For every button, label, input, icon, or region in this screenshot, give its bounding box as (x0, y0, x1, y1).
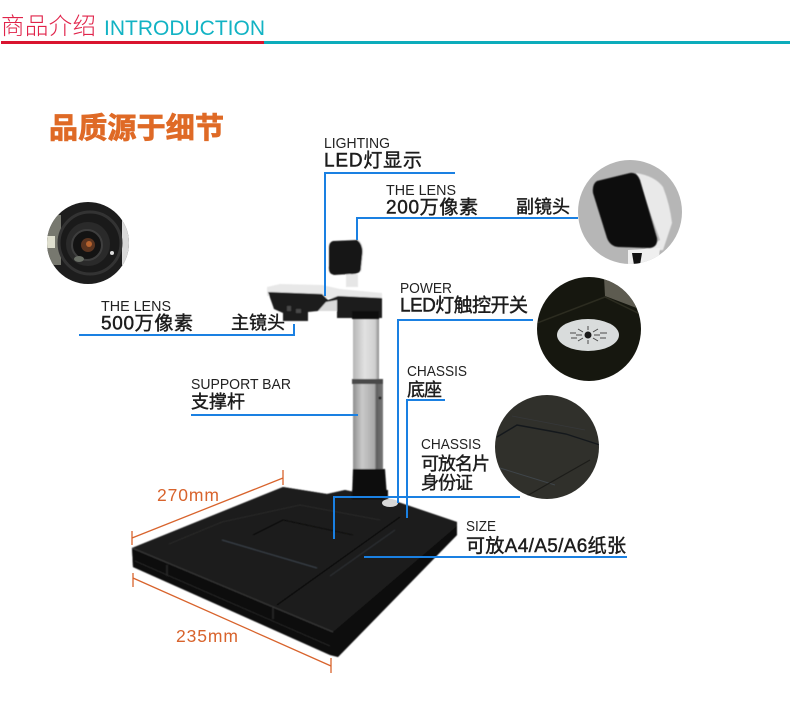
callout: chassis card slot: 可放名片 (421, 454, 490, 474)
callout: power: LED灯触控开关 (400, 294, 528, 316)
callout: secondary lens: 200万像素 (386, 196, 478, 218)
callout: paper size (364, 519, 627, 557)
header title: product introduction: INTRODUCTION (104, 17, 265, 40)
dimension: 235mm: 235mm (176, 626, 238, 646)
touch switch on base (382, 499, 398, 507)
callout: lighting (324, 136, 455, 296)
callout: power: POWER (400, 281, 452, 297)
callout: secondary lens (357, 183, 578, 240)
dimension: 270mm (132, 470, 283, 545)
callout: chassis base (407, 364, 467, 518)
callout: lighting: LIGHTING (324, 136, 390, 152)
callout: chassis base: CHASSIS (407, 364, 467, 380)
camera head arm (267, 284, 382, 321)
dimension: 270mm: 270mm (157, 485, 219, 505)
circle detail: power switch (537, 277, 642, 382)
callout: main lens (79, 299, 294, 335)
callout: power (398, 281, 533, 503)
header title: product introduction (1, 13, 265, 40)
callout: secondary lens: THE LENS (386, 183, 456, 199)
callout: main lens: 500万像素 (101, 312, 193, 334)
circle detail: chassis card slot (495, 394, 600, 500)
callout: support bar (191, 377, 358, 415)
callout: paper size: SIZE (466, 519, 496, 535)
callout: main lens: THE LENS (101, 299, 171, 315)
heading: quality lies in details: 品质源于细节 (49, 112, 224, 145)
callout: chassis base: 底座 (407, 380, 442, 400)
callout: support bar: 支撑杆 (191, 392, 245, 412)
base plate (132, 487, 457, 657)
callout: secondary lens: 副镜头 (516, 197, 570, 217)
callout: main lens: 主镜头 (231, 313, 285, 333)
header title: product introduction: 商品介绍 (1, 13, 96, 39)
dimension: 235mm (133, 573, 331, 673)
support column (352, 316, 388, 499)
header divider line (1, 41, 790, 44)
callout: chassis card slot (334, 437, 520, 539)
product: document camera (132, 240, 457, 657)
callout: chassis card slot: CHASSIS (421, 437, 481, 453)
circle detail: secondary camera (578, 160, 682, 265)
secondary camera (329, 240, 363, 287)
callout: lighting: LED灯显示 (324, 150, 422, 172)
callout: support bar: SUPPORT BAR (191, 377, 291, 393)
callout: chassis card slot: 身份证 (421, 473, 473, 493)
circle detail: main lens (47, 202, 130, 284)
callout: paper size: 可放A4/A5/A6纸张 (466, 535, 626, 557)
